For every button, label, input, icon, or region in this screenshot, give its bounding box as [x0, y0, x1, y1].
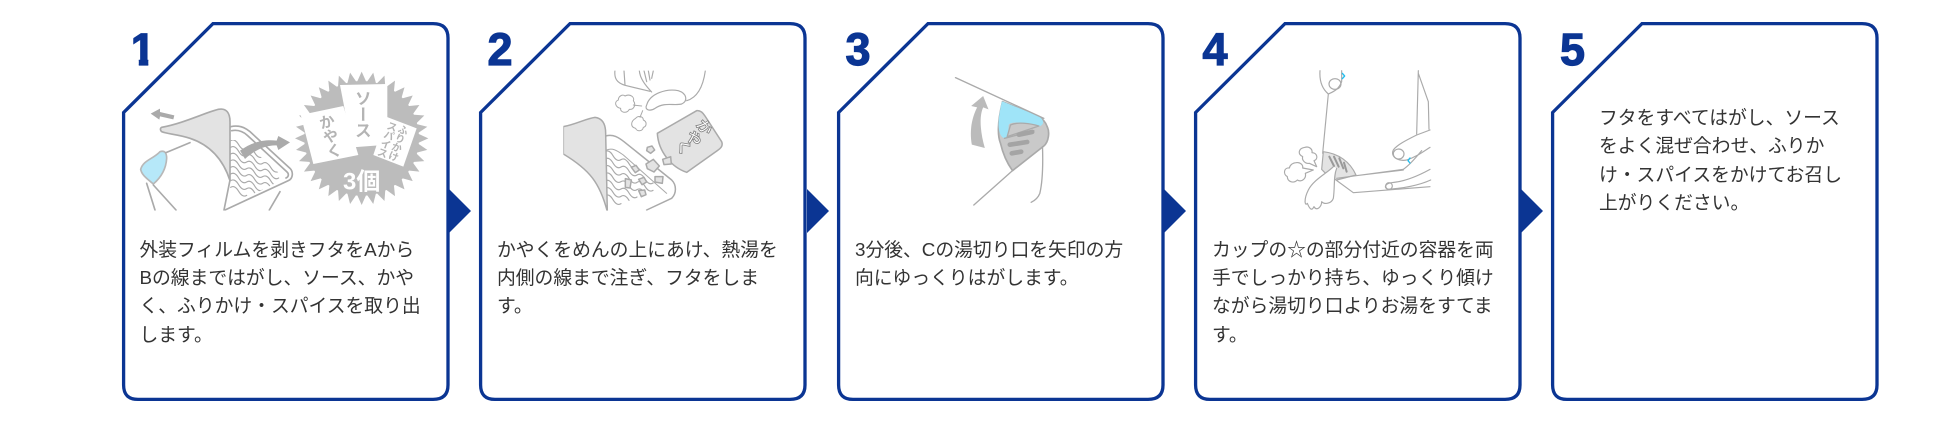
icon: starburst with packets: スパイス — [374, 119, 401, 160]
step 1 text: Bの線まではがし、ソース、かや — [140, 267, 414, 288]
icon: starburst with packets: かやく — [314, 111, 347, 161]
step 3 text: 向にゆっくりはがします。 — [855, 267, 1078, 288]
step 3 text: 3分後、Cの湯切り口を矢印の方 — [855, 238, 1123, 260]
step 5 text: フタをすべてはがし、ソース — [1599, 107, 1840, 128]
icon: starburst with packets: ふりかけ — [385, 122, 412, 163]
step 5 text — [1599, 107, 1842, 213]
step 5 text: をよく混ぜ合わせ、ふりか — [1599, 135, 1824, 156]
panel: step 4 — [1194, 22, 1522, 401]
step 1 text: します。 — [140, 324, 213, 345]
packet label かやく: く — [670, 134, 697, 160]
packet label かやく — [670, 114, 719, 160]
step 1 text: く、ふりかけ・スパイスを取り出 — [140, 295, 421, 316]
icon: starburst with packets: ソース — [351, 90, 375, 138]
step 4 text: 手でしっかり持ち、ゆっくり傾け — [1212, 267, 1494, 288]
illustration: peel lid and take out packets — [141, 72, 428, 210]
step 2 text — [497, 238, 778, 316]
step 4 text: ながら湯切り口よりお湯をすてま — [1212, 295, 1493, 316]
icon: starburst with packets: 3個 — [343, 168, 380, 195]
step 3 text — [855, 238, 1123, 288]
panel: step 3 — [836, 22, 1165, 401]
step 1 text — [140, 238, 421, 345]
illustration: hands draining hot water — [1284, 71, 1431, 209]
step number 4: 4 — [1202, 24, 1228, 75]
panel: step 1 — [122, 22, 450, 401]
illustration: pour kayaku onto noodles — [563, 70, 722, 212]
step 5 text: け・スパイスをかけてお召し — [1599, 164, 1842, 185]
step number 1: 1 — [130, 24, 155, 75]
step 4 text: カップの☆の部分付近の容器を両 — [1212, 238, 1494, 260]
step number 5: 5 — [1560, 24, 1585, 75]
step 4 text — [1212, 238, 1494, 345]
illustration: peel drain opening — [955, 78, 1048, 205]
step 2 text: 内側の線まで注ぎ、フタをしま — [497, 267, 759, 288]
panel: step 5 — [1550, 22, 1879, 401]
packet label かやく: や — [681, 125, 708, 151]
step 5 text: 上がりください。 — [1599, 192, 1749, 213]
arrow: step 1 to 2 — [450, 190, 471, 232]
arrow: step 3 to 4 — [1164, 190, 1186, 232]
packet label かやく: か — [691, 114, 719, 140]
step 2 text: す。 — [497, 295, 533, 316]
arrow: step 2 to 3 — [807, 189, 829, 233]
step 2 text: かやくをめんの上にあけ、熱湯を — [497, 238, 778, 260]
step number 3: 3 — [846, 24, 871, 75]
step 4 text: す。 — [1212, 324, 1248, 345]
step 1 text: 外装フィルムを剥きフタをAから — [140, 238, 414, 260]
icon: starburst with packets — [295, 72, 428, 205]
step number 2: 2 — [488, 24, 513, 75]
arrow: step 4 to 5 — [1522, 190, 1543, 232]
panel: step 2 — [478, 22, 807, 401]
